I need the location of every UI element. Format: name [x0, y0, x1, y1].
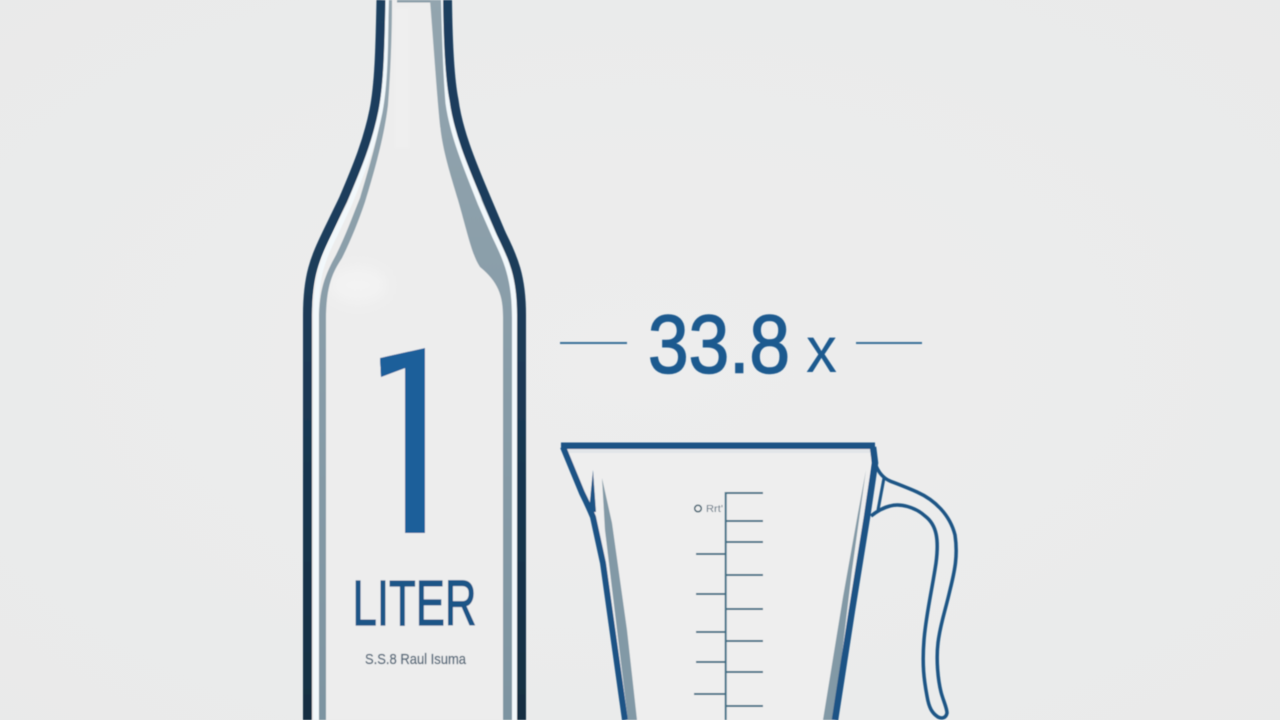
bottle interior — [312, 0, 518, 720]
jug handle brace — [878, 478, 884, 510]
scale marker ring — [695, 505, 701, 512]
bottle outline right — [448, 0, 522, 720]
left ticks — [694, 554, 726, 694]
jug outline left and spout — [563, 447, 625, 720]
LITER label: LITER — [352, 567, 476, 639]
bottle — [308, 0, 522, 720]
small caption: S.S.8 Raul Isuma — [365, 651, 467, 668]
right ticks — [725, 493, 763, 706]
bottle white line right — [444, 0, 514, 720]
jug rim shade — [566, 449, 870, 453]
jug outline right — [835, 447, 875, 720]
left rule — [560, 342, 627, 344]
bottle white line left — [316, 0, 386, 720]
measuring scale — [694, 492, 763, 720]
bottle outline left — [308, 0, 381, 720]
jug spout spike — [589, 470, 596, 512]
right rule — [856, 342, 922, 344]
multiplier x: x — [806, 313, 837, 386]
jug interior — [565, 448, 872, 720]
jug rim — [561, 442, 875, 449]
jug glass shade right — [823, 470, 866, 720]
jug glass shade left — [602, 478, 637, 720]
jug handle — [871, 463, 956, 718]
scale spine — [725, 492, 727, 720]
bottle inner glass left — [319, 0, 392, 720]
bottle highlight — [328, 266, 388, 304]
bottle inner glass right — [430, 0, 512, 720]
value 33.8: 33.8 — [648, 298, 790, 390]
conversion label — [560, 298, 922, 390]
bottle neck highlight — [395, 8, 409, 148]
measuring jug — [561, 442, 956, 720]
bottle cap edge — [397, 0, 432, 2]
numeral 1: 1 — [330, 294, 477, 589]
scale label: Rrt' — [706, 504, 723, 515]
